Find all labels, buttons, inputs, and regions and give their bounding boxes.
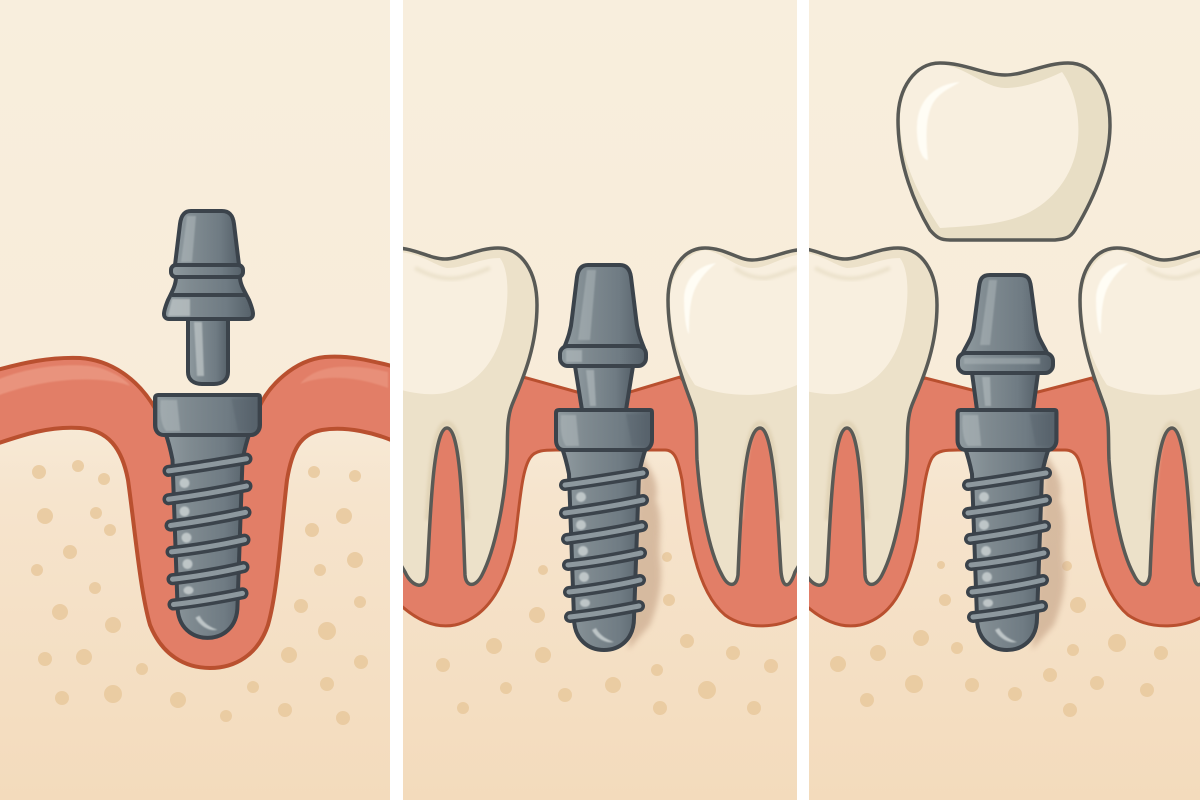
implant fixture — [958, 410, 1056, 650]
left tooth — [795, 248, 937, 585]
implant fixture — [155, 395, 260, 638]
abutment, separated above the fixture — [164, 211, 253, 384]
panel 3 background — [809, 0, 1200, 800]
panel 1 background — [0, 0, 390, 800]
panel 3 gum — [800, 378, 1200, 626]
implant fixture — [556, 410, 652, 650]
panel: stage 3, crown above the finished abutment — [795, 0, 1200, 800]
right tooth — [1080, 248, 1200, 585]
panel 2 gum — [395, 377, 805, 626]
panel 2 bone specks — [436, 552, 778, 715]
panel: stage 2, abutment fitted between neighbouring teeth — [395, 0, 805, 800]
panel 1 bone specks — [31, 460, 368, 725]
abutment attached — [958, 275, 1053, 410]
implant shadow on bone — [628, 452, 661, 650]
panel 3 bone specks — [830, 561, 1168, 717]
crown floating above the abutment — [898, 63, 1110, 240]
panel 2 background — [403, 0, 797, 800]
left tooth — [395, 248, 537, 585]
panel: stage 1, implant placed in the gum with separate abutment — [0, 0, 400, 800]
implant shadow on bone — [1032, 452, 1065, 650]
right tooth — [668, 248, 805, 585]
panel 1 gum — [0, 357, 400, 668]
abutment attached — [560, 265, 646, 410]
